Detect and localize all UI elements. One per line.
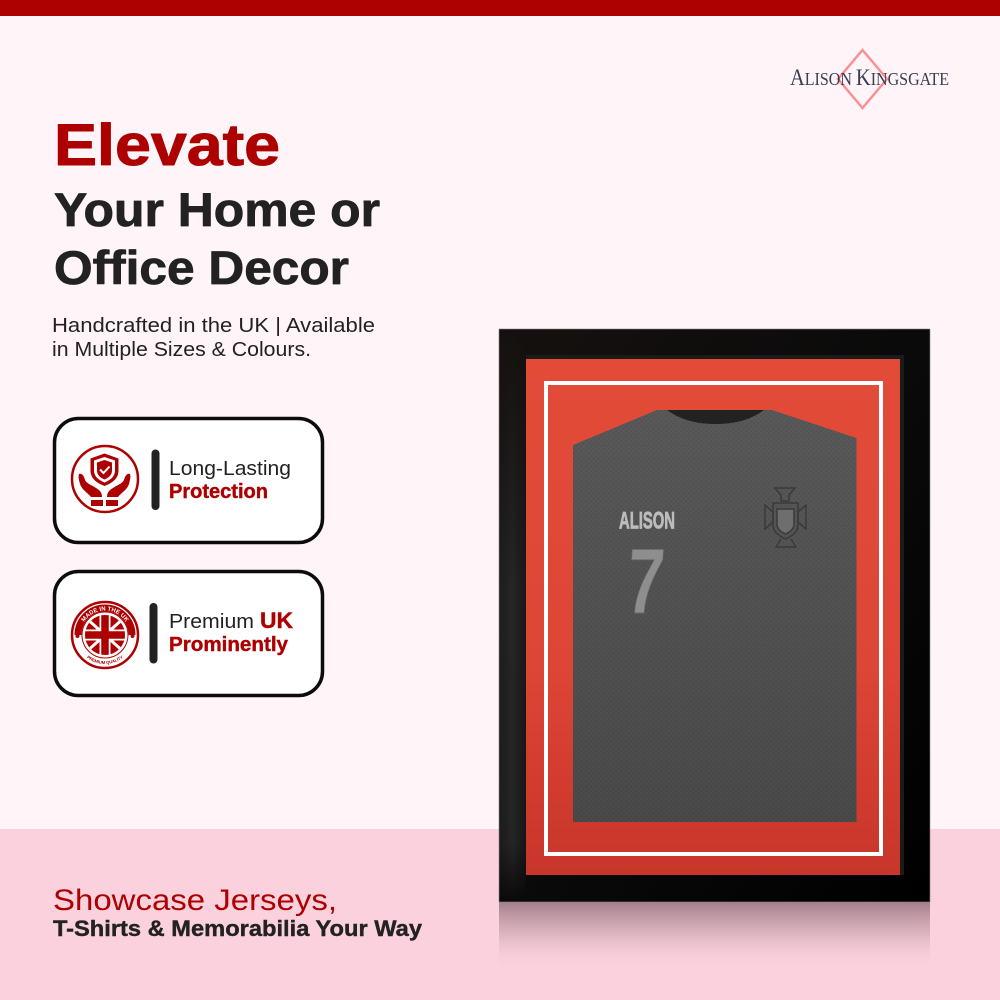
jersey	[573, 410, 856, 822]
frame reflection	[499, 902, 930, 970]
card text: UK	[260, 608, 293, 633]
icon: made in the UK badge	[70, 600, 140, 670]
black frame	[499, 329, 930, 902]
icon: made in the UK badge: PREMIUM QUALITY	[87, 655, 122, 665]
panel: premium UK card	[52, 570, 324, 698]
heading: Your Home or	[54, 183, 380, 236]
heading	[54, 113, 380, 294]
heading: Office Decor	[54, 241, 349, 294]
card text	[169, 458, 291, 503]
bottom pink band	[0, 829, 1000, 1000]
jersey name: ALISON	[619, 508, 675, 534]
card text: Protection	[169, 481, 268, 503]
icon: made in the UK badge: MADE IN THE UK	[81, 606, 130, 622]
red mount	[526, 359, 900, 875]
divider bar	[150, 603, 158, 664]
heading: Elevate	[54, 113, 280, 178]
divider bar	[152, 450, 160, 510]
white inner border	[546, 383, 881, 854]
bottom text: T-Shirts & Memorabilia Your Way	[53, 916, 423, 941]
subtitle text	[52, 315, 375, 361]
jersey crest	[765, 488, 806, 547]
card text: Prominently	[169, 634, 289, 656]
jersey collar	[667, 410, 764, 424]
subtitle text: Handcrafted in the UK | Available	[52, 315, 375, 337]
bottom text: Showcase Jerseys,	[53, 884, 337, 917]
card text: Long-Lasting	[169, 458, 291, 480]
icon: shield and hands	[72, 446, 138, 512]
top red bar	[0, 0, 1000, 16]
logo: Alison Kingsgate	[790, 50, 949, 108]
framed jersey	[499, 329, 930, 902]
subtitle text: in Multiple Sizes & Colours.	[52, 339, 311, 361]
card text: Premium	[169, 611, 254, 633]
bottom text	[53, 884, 423, 941]
jersey number: 7	[624, 529, 668, 633]
panel: long-lasting protection card	[54, 418, 322, 542]
card text	[169, 608, 293, 656]
logo: Alison Kingsgate: ALISON KINGSGATE	[790, 65, 949, 90]
